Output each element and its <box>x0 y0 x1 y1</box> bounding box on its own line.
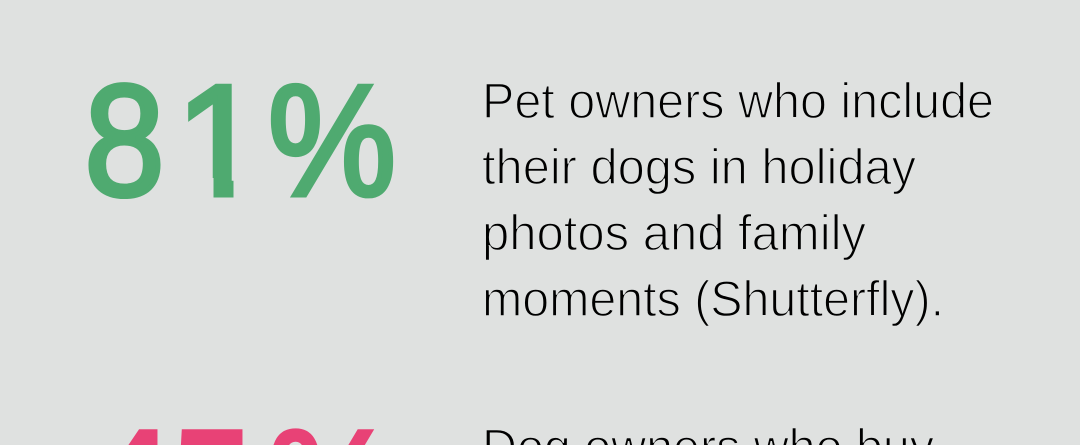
statistic: 81% <box>88 82 394 199</box>
text block: 81% description <box>482 73 994 327</box>
text block: 81% description: Pet owners who include <box>482 73 994 129</box>
statistic: 45% (cropped) <box>87 398 396 445</box>
statistic: 81%: 8 <box>84 53 164 229</box>
text block: 81% description: photos and family <box>482 205 866 261</box>
statistic: 81%: % <box>268 53 396 229</box>
text block: 81% description: moments (Shutterfly). <box>482 271 944 327</box>
text block: 81% description: their dogs in holiday <box>482 139 916 195</box>
statistic: 81%: 1 <box>176 53 263 229</box>
